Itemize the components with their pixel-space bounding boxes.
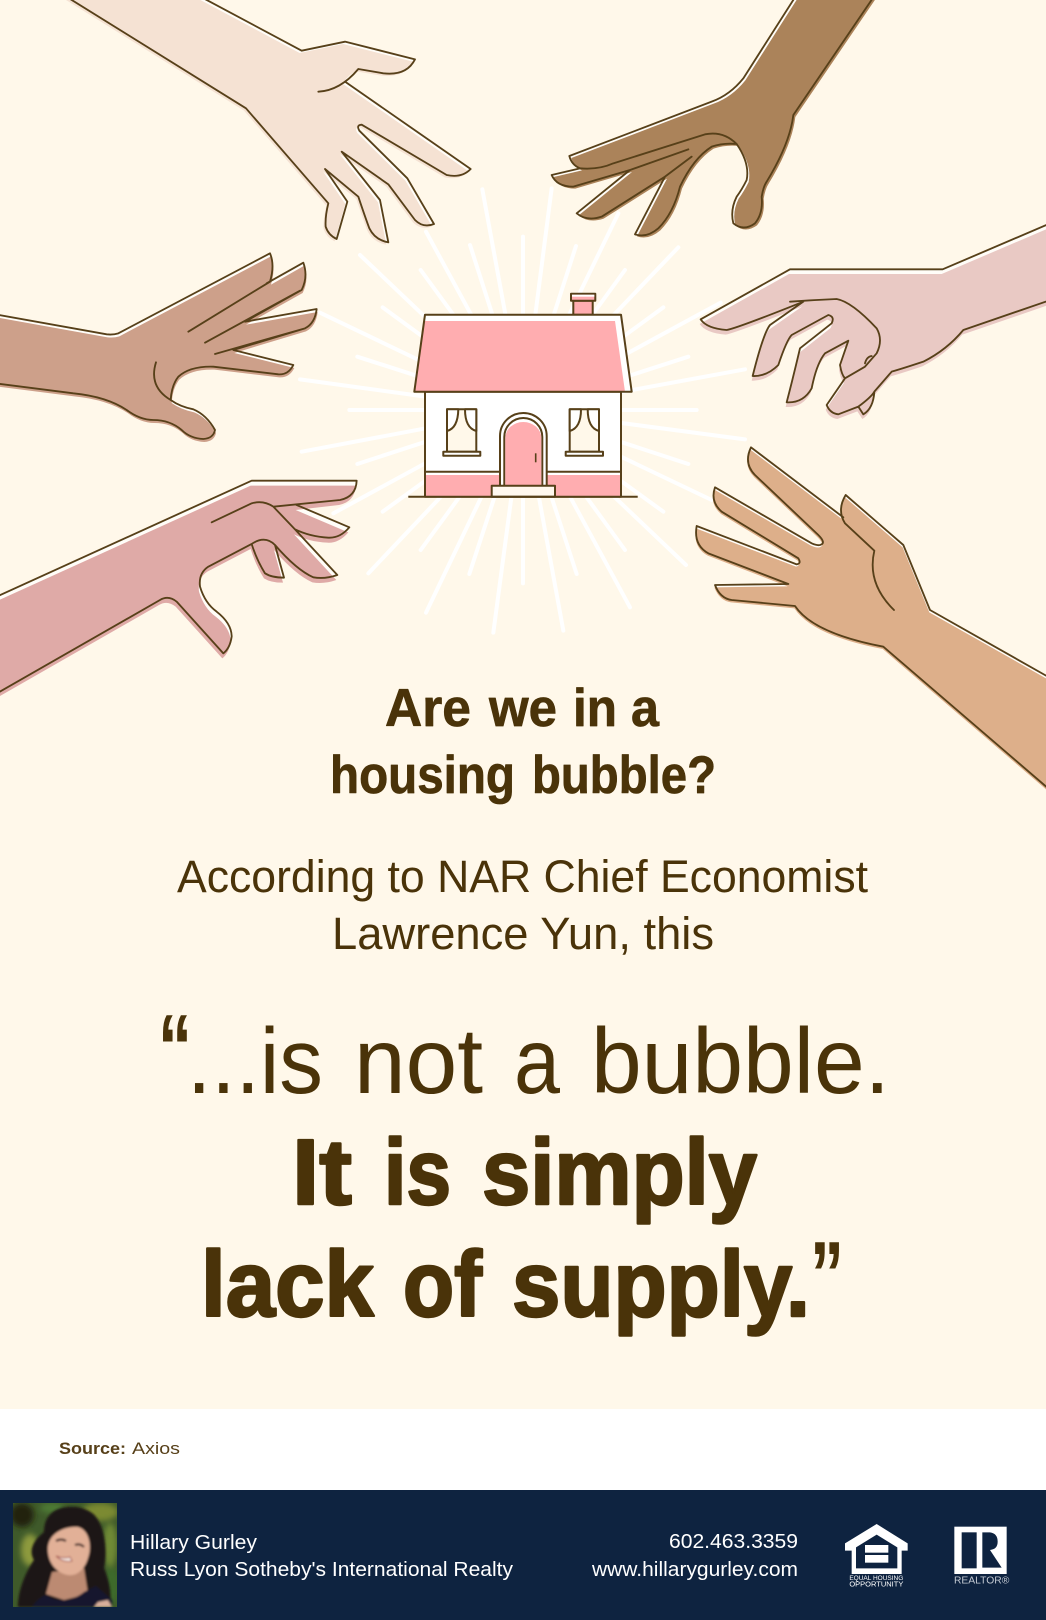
quote: it is simply: It bbox=[292, 1120, 352, 1224]
heading: are we in a housing bubble: a bbox=[631, 679, 659, 738]
chimney bbox=[571, 294, 595, 315]
source band bbox=[0, 1409, 1046, 1490]
quote: lack of supply: supply. bbox=[512, 1232, 810, 1336]
heading: are we in a housing bubble: in bbox=[573, 679, 617, 738]
face bbox=[48, 1527, 90, 1575]
door bbox=[500, 413, 547, 486]
hand: top left bbox=[54, 0, 471, 245]
quote: is not a bubble: a bbox=[514, 1009, 560, 1113]
attribution text bbox=[177, 851, 868, 959]
heading: are we in a housing bubble: bubble? bbox=[532, 746, 716, 805]
footer bar bbox=[0, 1490, 1046, 1620]
source credit: Axios bbox=[132, 1439, 180, 1458]
hand: lower right bbox=[695, 447, 1046, 798]
icon: realtor logo: REALTOR® bbox=[954, 1575, 1010, 1586]
contact details: 602.463.3359 bbox=[669, 1530, 798, 1553]
icon: equal housing opportunity bbox=[845, 1524, 908, 1588]
hand: middle right bbox=[700, 212, 1046, 419]
quote: it is simply: is bbox=[384, 1120, 451, 1224]
quote: lack of supply: lack bbox=[201, 1232, 374, 1336]
walls bbox=[425, 392, 621, 497]
heading: are we in a housing bubble bbox=[330, 679, 716, 805]
quote: lack of supply bbox=[201, 1222, 844, 1336]
eyes bbox=[56, 1540, 84, 1547]
hand: lower left bbox=[0, 481, 357, 702]
agent name and brokerage: Russ Lyon Sotheby's International Realty bbox=[130, 1558, 514, 1581]
quote: lack of supply: ” bbox=[810, 1222, 844, 1326]
roof bbox=[414, 315, 632, 392]
agent name and brokerage bbox=[130, 1531, 514, 1581]
quote: is not a bubble: bubble. bbox=[591, 1009, 890, 1113]
contact details: www.hillarygurley.com bbox=[591, 1558, 798, 1581]
heading: are we in a housing bubble: Are bbox=[385, 679, 471, 738]
hand: top right bbox=[552, 0, 880, 237]
icon: equal housing opportunity: OPPORTUNITY bbox=[849, 1581, 904, 1588]
smile bbox=[56, 1556, 72, 1561]
door step bbox=[492, 486, 555, 497]
icon: realtor logo bbox=[954, 1527, 1010, 1586]
heading: are we in a housing bubble: housing bbox=[330, 746, 515, 805]
source credit: Source: bbox=[59, 1439, 126, 1458]
quote: is not a bubble: “ bbox=[158, 995, 192, 1099]
contact details bbox=[591, 1530, 798, 1581]
quote: it is simply: simply bbox=[482, 1120, 757, 1224]
hair bbox=[18, 1507, 111, 1607]
attribution text: Lawrence Yun, this bbox=[332, 908, 714, 959]
agent portrait bbox=[10, 1503, 120, 1607]
left window bbox=[443, 409, 480, 456]
agent name and brokerage: Hillary Gurley bbox=[130, 1531, 258, 1554]
source credit bbox=[59, 1439, 180, 1458]
right window bbox=[566, 409, 603, 456]
house illustration bbox=[408, 294, 638, 497]
base band bbox=[425, 472, 621, 496]
heading: are we in a housing bubble: we bbox=[488, 679, 557, 738]
sunburst rays bbox=[300, 188, 745, 633]
icon: equal housing opportunity: EQUAL HOUSING bbox=[849, 1576, 904, 1582]
quote: lack of supply: of bbox=[403, 1232, 483, 1336]
attribution text: According to NAR Chief Economist bbox=[177, 851, 868, 902]
quote: it is simply bbox=[292, 1120, 757, 1224]
quote: is not a bubble: not bbox=[354, 1009, 483, 1113]
quote: is not a bubble bbox=[158, 995, 890, 1113]
neck and chest bbox=[46, 1568, 88, 1600]
quote: is not a bubble: ...is bbox=[187, 1009, 323, 1113]
hand: upper left bbox=[0, 253, 318, 442]
dress bbox=[32, 1586, 112, 1607]
ground line bbox=[408, 496, 638, 498]
